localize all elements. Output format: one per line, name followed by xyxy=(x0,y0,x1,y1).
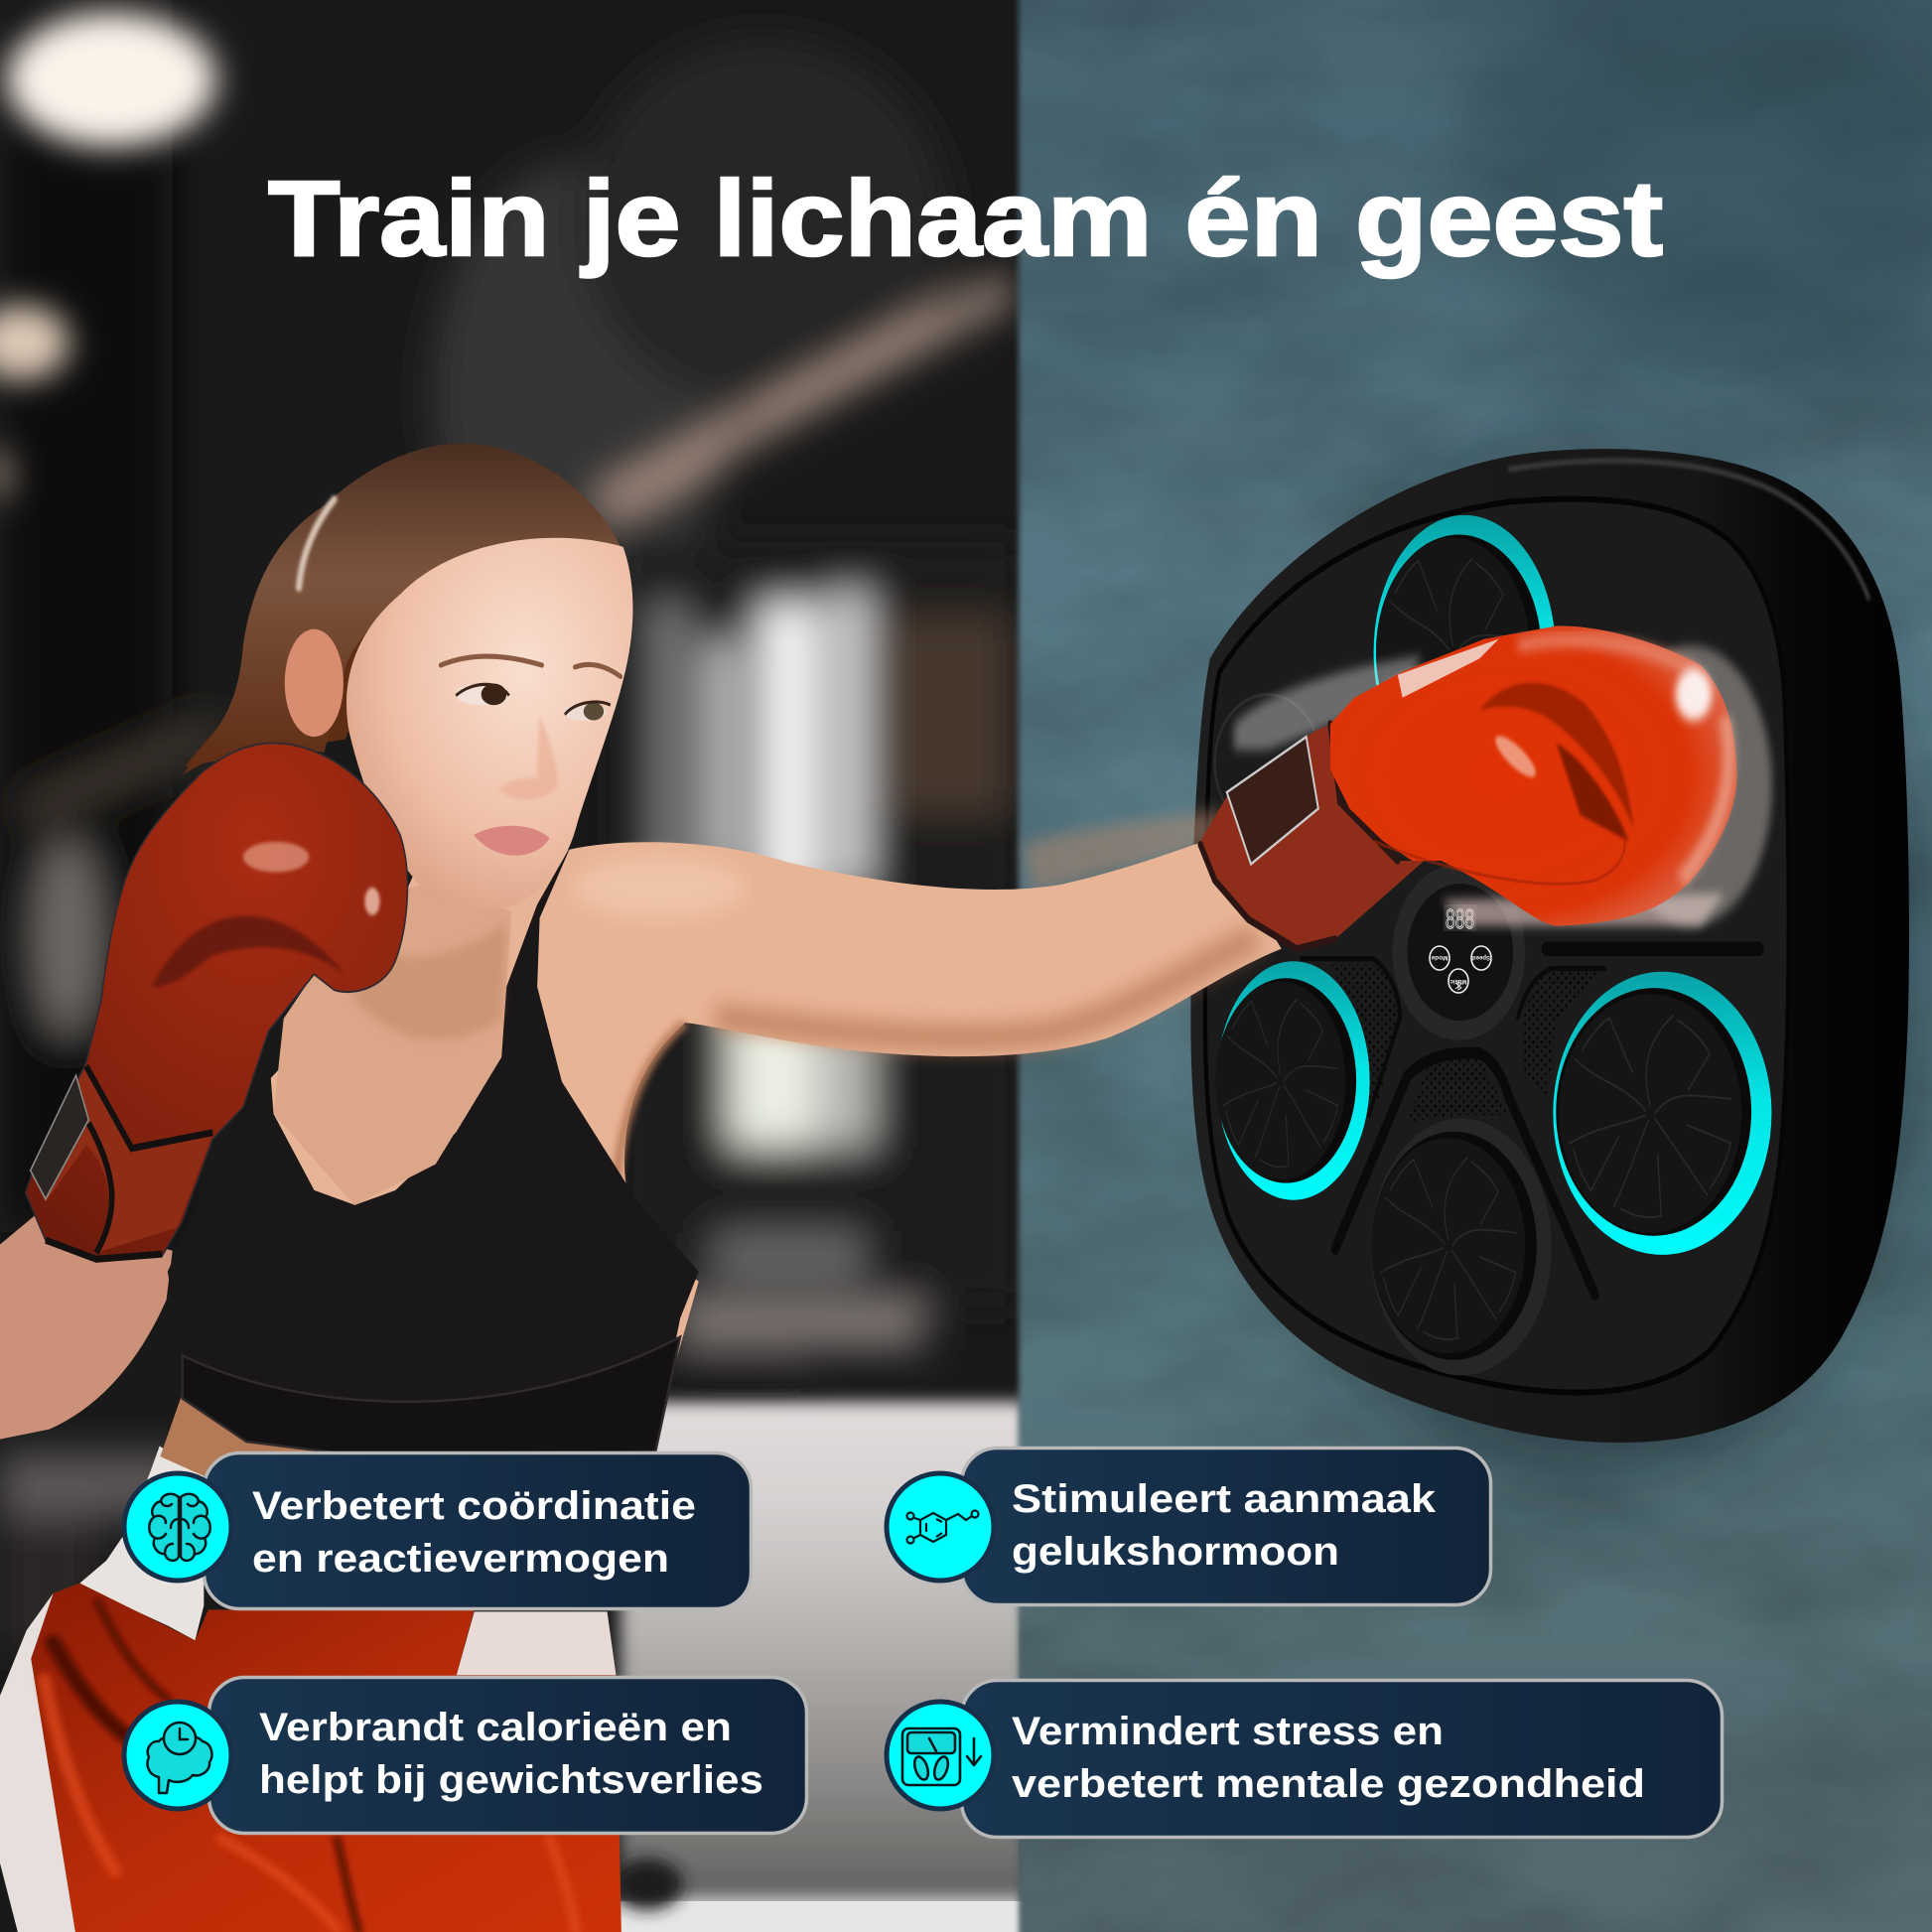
machine face xyxy=(1205,499,1789,1393)
speaker perforations xyxy=(1330,965,1604,1122)
callout text: helpt bij gewichtsverlies xyxy=(259,1758,763,1802)
callout text: gelukshormoon xyxy=(1012,1530,1339,1574)
button: mode: Mode xyxy=(1431,954,1448,961)
machine shell xyxy=(1190,449,1909,1443)
thumb crease xyxy=(1479,683,1633,828)
glove highlights xyxy=(243,842,309,873)
neck shadow xyxy=(354,923,506,1040)
neck xyxy=(274,886,511,1205)
smoke trail xyxy=(1234,655,1422,750)
callout text: Verbrandt calorieën en xyxy=(259,1706,732,1749)
eyes xyxy=(456,684,611,721)
callout: stress xyxy=(887,1680,1722,1837)
bra band xyxy=(183,1337,680,1453)
callout: calories xyxy=(124,1678,806,1833)
bra xyxy=(168,844,699,1453)
cuff strap xyxy=(31,1066,212,1253)
background: blurred gym xyxy=(0,0,1033,1932)
lips xyxy=(474,826,550,856)
torso and extended arm xyxy=(246,838,1282,1442)
top pad with cyan ring xyxy=(1374,515,1556,789)
icon circle: brain with clock xyxy=(124,1702,231,1809)
callout text: Stimuleert aanmaak xyxy=(1012,1477,1437,1521)
rim highlight xyxy=(1508,461,1869,600)
callout text: verbetert mentale gezondheid xyxy=(1012,1762,1645,1806)
grooves xyxy=(1302,949,1758,1295)
right glove with motion blur xyxy=(1200,625,1772,949)
bottom pad xyxy=(1371,1119,1552,1375)
icon circle: brain xyxy=(124,1473,231,1581)
shoulder highlight xyxy=(573,857,746,918)
hair highlight xyxy=(299,499,335,588)
face xyxy=(346,538,632,909)
digital display and buttons xyxy=(1430,903,1491,993)
callout text: Vermindert stress en xyxy=(1012,1710,1444,1753)
shorts xyxy=(0,1447,621,1932)
right side pale edge xyxy=(1682,718,1729,881)
top white sheen xyxy=(1398,639,1499,698)
background: teal wall xyxy=(1019,0,1932,1932)
hair xyxy=(183,444,625,774)
ear xyxy=(285,629,344,737)
faded left-top pad xyxy=(1215,695,1320,831)
knuckle highlight xyxy=(1675,668,1712,721)
left pad with cyan ring xyxy=(1216,961,1370,1200)
glove body xyxy=(1330,625,1737,926)
arm underside shading xyxy=(715,936,1257,1037)
top lighter edge xyxy=(1518,640,1696,672)
left glove xyxy=(26,743,407,1259)
callout text: en reactievermogen xyxy=(252,1537,669,1581)
score digits: 888 xyxy=(1446,903,1474,934)
wrist cuff xyxy=(1200,724,1424,949)
eyebrows xyxy=(441,656,621,676)
button: speed: Speed xyxy=(1472,954,1490,960)
armpit shading xyxy=(617,1023,685,1182)
control panel xyxy=(1392,864,1525,1040)
callout text: Verbetert coördinatie xyxy=(252,1484,696,1528)
boxing machine xyxy=(1190,449,1909,1443)
icon circle: molecule xyxy=(887,1473,994,1581)
button: bluetooth: Music xyxy=(1449,978,1467,984)
shorts folds xyxy=(54,1601,359,1932)
crease shadow xyxy=(1557,744,1628,841)
icon circle: scale xyxy=(887,1702,994,1809)
thumb highlight xyxy=(1491,729,1540,783)
motion ghost xyxy=(1610,645,1772,926)
arm motion blur xyxy=(1023,809,1221,894)
bottom streak xyxy=(1441,894,1725,926)
head xyxy=(183,444,632,1205)
ponytail xyxy=(185,486,369,766)
rear forearm xyxy=(0,1213,173,1440)
callout: happiness hormone xyxy=(887,1448,1491,1604)
glove palm fold xyxy=(152,916,345,987)
thumb outline xyxy=(1374,828,1625,884)
right pad with cyan ring xyxy=(1553,972,1771,1255)
woman boxer xyxy=(0,444,1282,1932)
title: Train je lichaam én geest xyxy=(268,158,1663,278)
nose xyxy=(499,715,558,800)
waist skin xyxy=(160,1386,369,1478)
callout: coordination xyxy=(124,1453,751,1608)
